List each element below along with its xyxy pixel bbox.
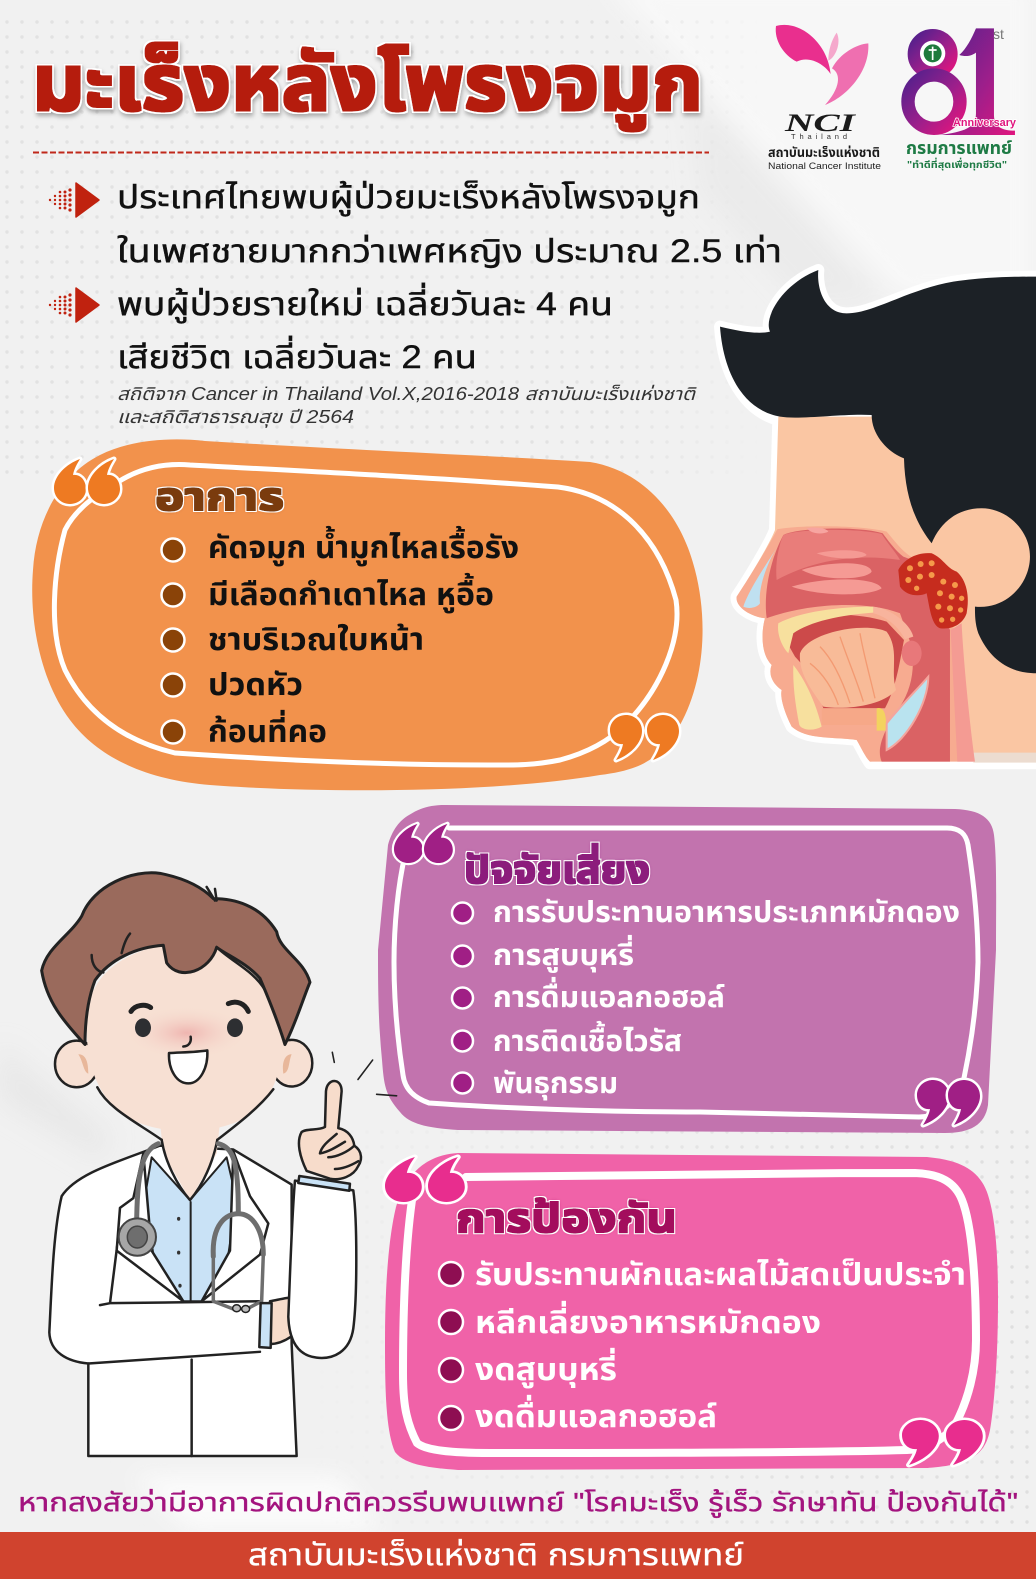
text: source note: และสถิติสาธารณสุข ปี 2564 xyxy=(117,407,354,428)
icon: arrow bullet 1 xyxy=(49,183,99,217)
panel: prevention xyxy=(385,1153,998,1470)
risk list: พันธุกรรม xyxy=(493,1068,618,1100)
prevention list: รับประทานผักและผลไม้สดเป็นประจำ xyxy=(475,1257,966,1292)
symptom list: มีเลือดกำเดาไหล หูอื้อ xyxy=(208,572,494,613)
head xyxy=(55,941,312,1140)
footer bar: สถาบันมะเร็งแห่งชาติ กรมการแพทย์ xyxy=(248,1539,744,1572)
symptom list: คัดจมูก น้ำมูกไหลเรื้อรัง xyxy=(208,525,519,566)
symptom list xyxy=(162,525,519,749)
prevention list: งดดื่มแอลกอฮอล์ xyxy=(475,1394,717,1434)
logo: National Cancer Institute: NCI xyxy=(783,110,857,137)
prevention list xyxy=(439,1257,966,1434)
panel: risk factors xyxy=(378,805,996,1133)
stethoscope xyxy=(119,1144,263,1313)
text: source note xyxy=(117,384,697,428)
logo: 81st anniversary: st xyxy=(993,26,1004,42)
quote mark open xyxy=(385,1157,465,1202)
logo: National Cancer Institute: Thailand xyxy=(791,132,847,141)
face silhouette xyxy=(720,270,1036,763)
illustration: doctor xyxy=(42,873,397,1456)
risk list: การรับประทานอาหารประเภทหมักดอง xyxy=(493,897,960,929)
prevention list: งดสูบบุหรี่ xyxy=(475,1347,617,1388)
nasal and throat anatomy xyxy=(737,526,975,762)
quote mark close xyxy=(902,1420,983,1465)
text: statistic line 4: เสียชีวิต เฉลี่ยวันละ 2 คน xyxy=(117,335,477,375)
risk list: การดื่มแอลกอฮอล์ xyxy=(493,976,725,1014)
symptom list: ชาบริเวณใบหน้า xyxy=(208,622,424,657)
hair xyxy=(42,873,310,1044)
logo: 81st anniversary: กรมการแพทย์ xyxy=(906,138,1012,158)
icon: arrow bullet 2 xyxy=(49,288,99,322)
shirt and neck xyxy=(117,1122,268,1301)
risk list: การติดเชื้อไวรัส xyxy=(493,1020,682,1058)
prevention list: หลีกเลี่ยงอาหารหมักดอง xyxy=(475,1300,821,1340)
motion ticks xyxy=(332,1052,397,1096)
logo: 81st anniversary xyxy=(906,26,1017,171)
tumour xyxy=(898,553,968,629)
hair xyxy=(720,270,1036,673)
text: statistic line 2: ในเพศชายมากกว่าเพศหญิง ประมาณ 2.5 เท่า xyxy=(117,233,782,269)
text: statistic line 3: พบผู้ป่วยรายใหม่ เฉลี่ยวันละ 4 คน xyxy=(117,282,613,324)
symptom list: ก้อนที่คอ xyxy=(208,709,327,749)
lab coat xyxy=(49,1146,297,1456)
logo: National Cancer Institute xyxy=(768,25,881,171)
quote mark open xyxy=(54,459,120,504)
face features xyxy=(131,1002,248,1083)
footer message: หากสงสัยว่ามีอาการผิดปกติควรรีบพบแพทย์ "โรคมะเร็ง รู้เร็ว รักษาทัน ป้องกันได้" xyxy=(18,1487,1018,1518)
footer bar xyxy=(0,1532,1036,1579)
illustration: head cross-section xyxy=(720,270,1036,763)
panel: symptoms xyxy=(32,439,703,790)
title: มะเร็งหลังโพรงจมูก xyxy=(32,39,703,131)
logo: National Cancer Institute: National Cancer Institute xyxy=(768,161,881,171)
logo: National Cancer Institute: สถาบันมะเร็งแห่งชาติ xyxy=(768,145,880,160)
heading: อาการ xyxy=(155,477,284,519)
heading: ปัจจัยเสี่ยง xyxy=(464,843,650,892)
logo: 81st anniversary: "ทำดีที่สุดเพื่อทุกชีวิต" xyxy=(907,157,1007,171)
text: statistic line 1: ประเทศไทยพบผู้ป่วยมะเร็งหลังโพรงจมูก xyxy=(117,179,700,217)
cuff and wrist xyxy=(259,1297,292,1348)
symptom list: ปวดหัว xyxy=(208,667,303,702)
logo: 81st anniversary: Anniversary xyxy=(953,117,1017,129)
raised arm xyxy=(288,1081,361,1358)
text: source note: สถิติจาก Cancer in Thailand Vol.X,2016-2018 สถาบันมะเร็งแห่งชาติ xyxy=(117,384,697,404)
risk list xyxy=(452,897,960,1100)
quote mark open xyxy=(394,824,453,863)
risk list: การสูบบุหรี่ xyxy=(493,934,634,973)
quote mark close xyxy=(610,715,679,760)
heading: การป้องกัน xyxy=(456,1197,677,1241)
quote mark close xyxy=(917,1080,980,1125)
